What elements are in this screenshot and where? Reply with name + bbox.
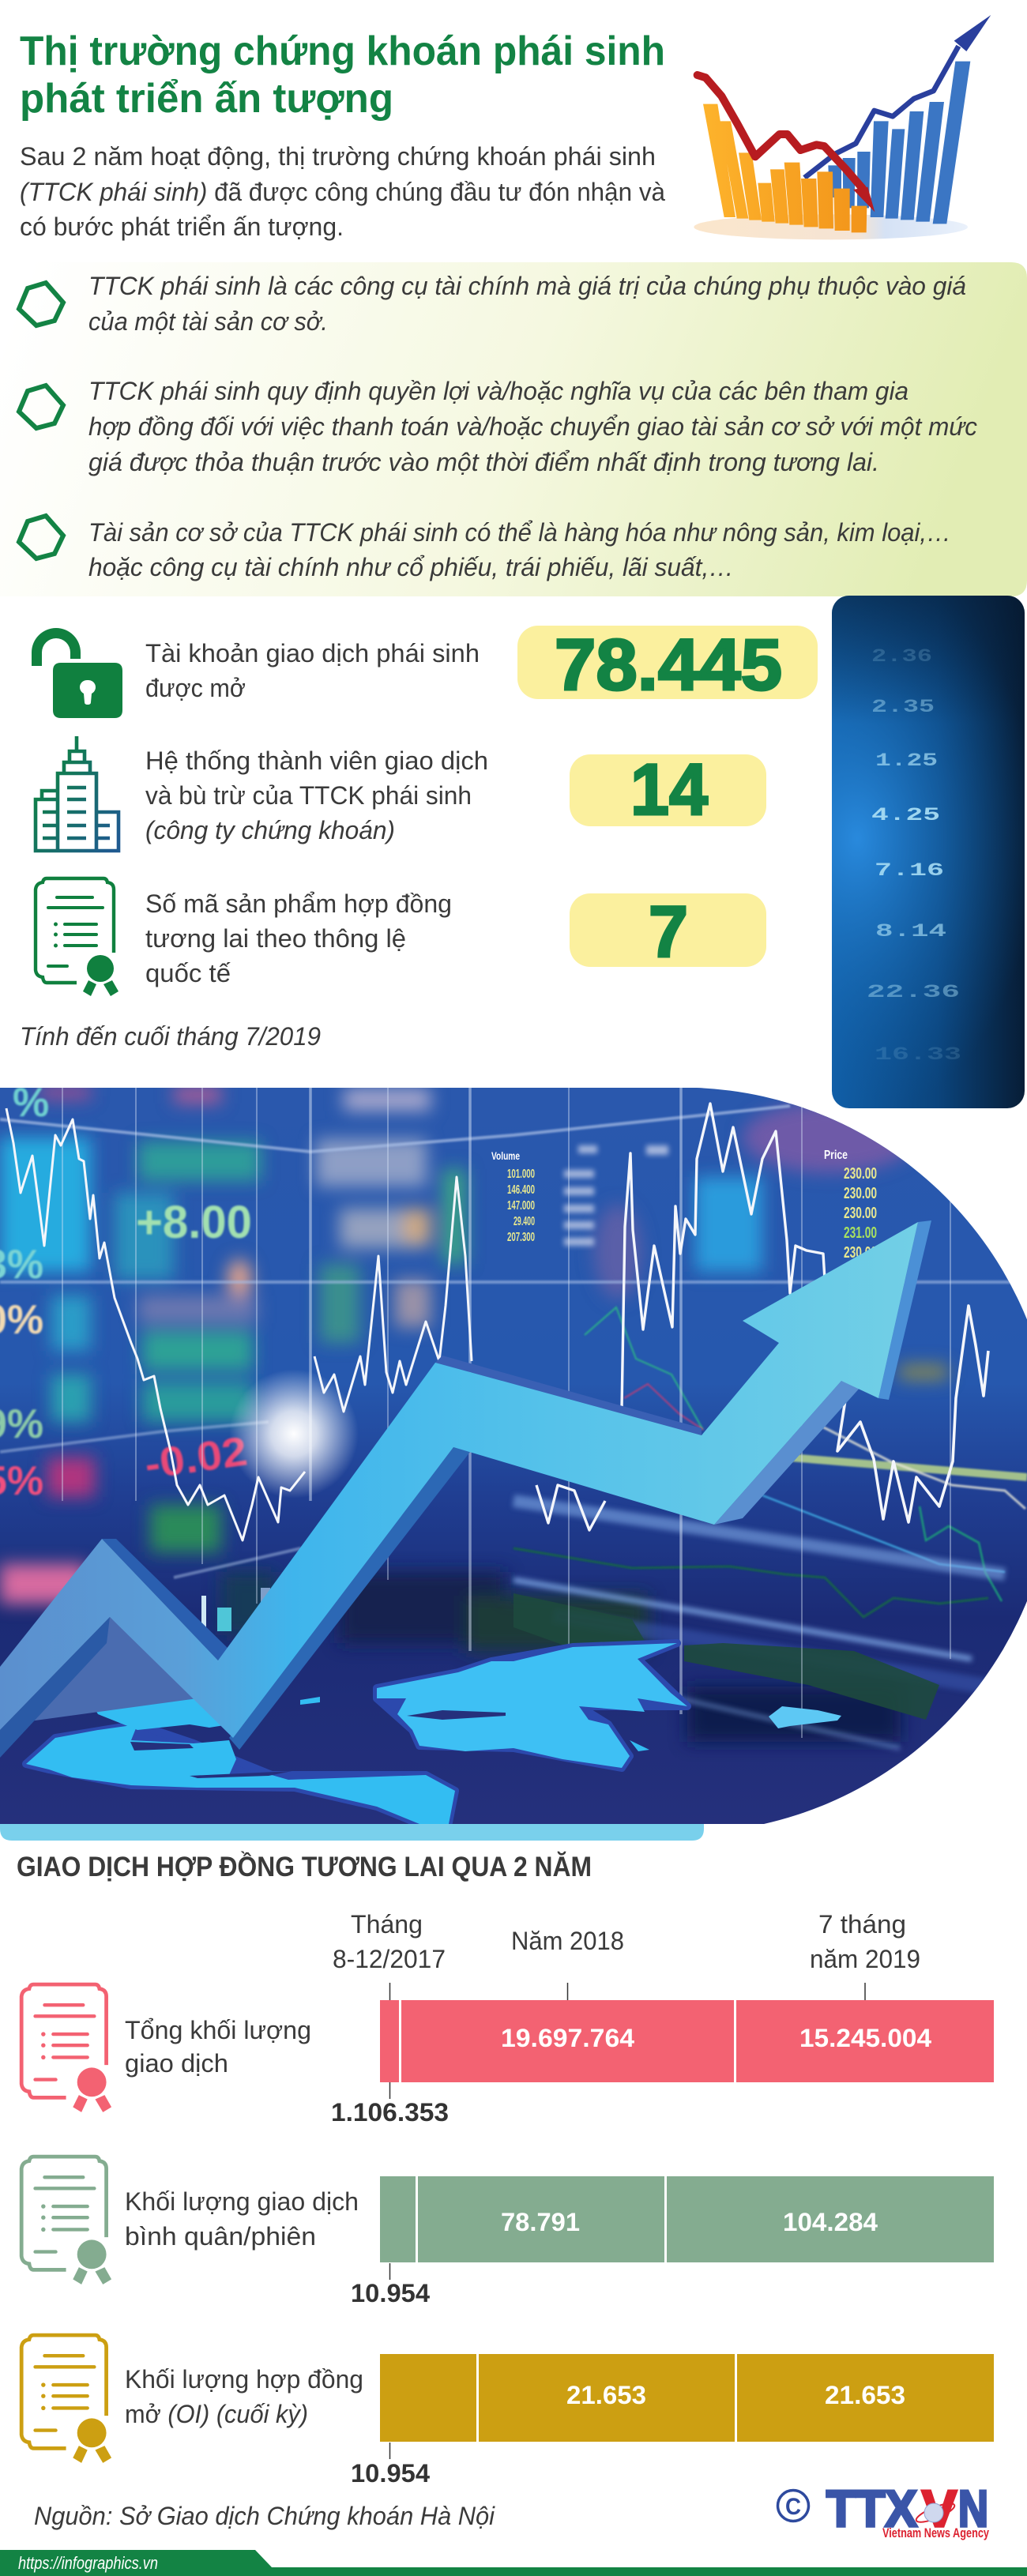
panel: blue numbers image: 8.14 xyxy=(875,921,946,942)
date note: Tính đến cuối tháng 7/2019 xyxy=(20,1022,321,1051)
grid lines xyxy=(62,1088,950,1738)
bullet text 3: Tài sản cơ sở của TTCK phái sinh có thể là hàng hóa như nông sản, kim loại,… xyxy=(88,518,951,547)
stacked bar: 19.697.764 xyxy=(501,2024,634,2052)
world map xyxy=(26,1643,841,1824)
lens flare xyxy=(229,1369,359,1499)
stat label xyxy=(145,889,452,987)
bullet text 1: TTCK phái sinh là các công cụ tài chính mà giá trị của chúng phụ thuộc vào giá xyxy=(88,272,966,300)
bullet text 2: TTCK phái sinh quy định quyền lợi và/hoặc nghĩa vụ của các bên tham gia xyxy=(88,377,908,405)
stat label: quốc tế xyxy=(145,959,231,987)
column headers: Năm 2018 xyxy=(511,1927,624,1955)
photo: stock market with rising arrow: Volume xyxy=(491,1149,520,1162)
strip under photo xyxy=(0,1817,704,1841)
stat value pill xyxy=(570,750,766,830)
icon: gold certificate xyxy=(21,2335,111,2463)
row label xyxy=(125,2365,363,2428)
source note: Nguồn: Sở Giao dịch Chứng khoán Hà Nội xyxy=(34,2502,495,2530)
bullet text 2: giá được thỏa thuận trước vào một thời điểm nhất định trong tương lai. xyxy=(88,448,879,476)
row label: Khối lượng giao dịch xyxy=(125,2187,359,2216)
stat value pill: 14 xyxy=(630,750,708,830)
stat label: Số mã sản phẩm hợp đồng xyxy=(145,889,452,918)
photo: stock market with rising arrow: 231.00 xyxy=(844,1224,877,1242)
stacked bar: 21.653 xyxy=(566,2381,646,2409)
photo: stock market with rising arrow: 230.00 xyxy=(844,1185,877,1202)
logo: TTXVN: Vietnam News Agency xyxy=(882,2525,989,2540)
small value callout xyxy=(351,2442,430,2488)
bullet text 3 xyxy=(88,518,951,581)
row label: Tổng khối lượng xyxy=(125,2016,311,2044)
footer band: https://infographics.vn xyxy=(18,2553,158,2573)
panel: blue numbers image: 2.36 xyxy=(871,646,932,667)
small value callout: 10.954 xyxy=(351,2459,430,2488)
white market lines xyxy=(6,1104,988,1540)
panel: blue numbers image: 2.35 xyxy=(871,697,935,717)
icon: hexagon bullet 3 xyxy=(19,516,63,558)
row: average volume per session xyxy=(21,2157,994,2307)
footer band xyxy=(0,2550,1027,2576)
small value callout: 10.954 xyxy=(351,2279,430,2307)
panel: blue numbers image: 1.25 xyxy=(875,750,938,771)
panel: blue numbers image: 16.33 xyxy=(875,1044,961,1065)
blue glowing streaks xyxy=(514,1501,1005,1748)
photo: stock market with rising arrow: % xyxy=(13,1080,49,1126)
photo: stock market with rising arrow: 230.00 xyxy=(844,1205,877,1222)
photo: stock market with rising arrow: -0.02 xyxy=(142,1428,250,1488)
stacked bar: 21.653 xyxy=(825,2381,905,2409)
title: Thị trường chứng khoán phái sinh xyxy=(20,28,665,74)
photo: stock market with rising arrow: 101.000 xyxy=(507,1168,535,1181)
stat label: Hệ thống thành viên giao dịch xyxy=(145,746,488,775)
icon: certificate xyxy=(36,878,118,996)
rising arrow xyxy=(0,1220,931,1758)
row label: Khối lượng hợp đồng xyxy=(125,2365,363,2394)
heading: futures trading: GIAO DỊCH HỢP ĐỒNG TƯƠNG LAI QUA 2 NĂM xyxy=(17,1851,592,1882)
photo: stock market with rising arrow xyxy=(0,1080,1027,1824)
icon: office buildings xyxy=(36,736,118,851)
stat: member companies xyxy=(36,736,766,851)
icon: red certificate xyxy=(21,1984,111,2112)
stat value pill: 7 xyxy=(649,892,688,972)
bullet text 2 xyxy=(88,377,977,476)
photo: stock market with rising arrow: 230.00 xyxy=(844,1244,877,1262)
panel: definitions xyxy=(0,262,1027,596)
icon: hexagon bullet 2 xyxy=(19,385,63,428)
icon: green certificate xyxy=(21,2157,111,2285)
icon: hexagon bullet 1 xyxy=(19,283,63,325)
stat label: được mở xyxy=(145,674,246,702)
stat: accounts opened xyxy=(32,625,818,718)
stat value pill xyxy=(570,892,766,972)
photo: stock market with rising arrow: Price xyxy=(824,1149,848,1162)
grey bars under the arrow peak xyxy=(24,1588,270,1722)
icon: open padlock xyxy=(32,628,122,718)
stat label: Tài khoản giao dịch phái sinh xyxy=(145,639,480,668)
logo: TTXVN: V xyxy=(922,2480,957,2537)
logo: TTXVN: C xyxy=(785,2494,801,2520)
stacked bar xyxy=(380,2354,994,2442)
small value callout xyxy=(351,2263,430,2307)
column headers: năm 2019 xyxy=(810,1945,920,1973)
stacked bar xyxy=(380,2000,994,2082)
bullet text 1 xyxy=(88,272,966,336)
intro text: Sau 2 năm hoạt động, thị trường chứng khoán phái sinh xyxy=(20,142,656,171)
icon: bar chart with up and down arrows xyxy=(694,15,991,239)
row: total volume xyxy=(21,1984,994,2127)
logo: TTXVN xyxy=(777,2480,989,2540)
stacked bar xyxy=(380,2176,994,2262)
panel: blue numbers image xyxy=(832,596,1025,1108)
stat value pill: 78.445 xyxy=(555,625,782,705)
small value callout: 1.106.353 xyxy=(331,2098,449,2127)
row label xyxy=(125,2016,311,2078)
photo: stock market with rising arrow: 207.300 xyxy=(507,1231,535,1244)
column headers: Tháng xyxy=(351,1910,423,1939)
stat: product codes xyxy=(36,878,766,996)
photo: stock market with rising arrow: 230.00 xyxy=(844,1165,877,1183)
stacked bar: 78.791 xyxy=(501,2208,580,2236)
stacked bar: 104.284 xyxy=(783,2208,878,2236)
row label: mở (OI) (cuối kỳ) xyxy=(125,2400,308,2428)
dark green chart band xyxy=(514,1593,939,1720)
row label: bình quân/phiên xyxy=(125,2222,316,2251)
panel: blue numbers image: 4.25 xyxy=(871,805,940,825)
title: phát triển ấn tượng xyxy=(20,76,393,122)
column headers: 8-12/2017 xyxy=(333,1945,446,1973)
streak lines xyxy=(0,1106,1027,1617)
stat label: tương lai theo thông lệ xyxy=(145,924,406,953)
bullet text 1: của một tài sản cơ sở. xyxy=(88,307,328,336)
row label: giao dịch xyxy=(125,2049,228,2078)
stat label: và bù trừ của TTCK phái sinh xyxy=(145,781,472,810)
bullet text 3: hoặc công cụ tài chính như cổ phiếu, trái phiếu, lãi suất,… xyxy=(88,553,734,581)
photo: stock market with rising arrow: 29.400 xyxy=(514,1215,535,1228)
panel: blue numbers image: 22.36 xyxy=(867,982,960,1002)
photo: stock market with rising arrow: 147.000 xyxy=(507,1199,535,1213)
column headers xyxy=(333,1910,920,2000)
logo: TTXVN: TTX xyxy=(826,2480,917,2537)
title xyxy=(20,28,665,122)
bullet text 2: hợp đồng đối với việc thanh toán và/hoặc chuyển giao tài sản cơ sở với một mức xyxy=(88,412,977,441)
photo: stock market with rising arrow: 146.400 xyxy=(507,1183,535,1197)
stacked bar: 15.245.004 xyxy=(799,2024,931,2052)
intro text xyxy=(20,142,666,241)
intro text: (TTCK phái sinh) đã được công chúng đầu tư đón nhận và xyxy=(20,178,666,206)
photo: stock market with rising arrow: +8.00 xyxy=(136,1197,252,1248)
logo: TTXVN: N xyxy=(958,2480,988,2537)
column headers: 7 tháng xyxy=(818,1910,906,1939)
intro text: có bước phát triển ấn tượng. xyxy=(20,212,344,241)
row label xyxy=(125,2187,359,2251)
stat label: (công ty chứng khoán) xyxy=(145,816,395,844)
stat label xyxy=(145,639,480,702)
row: open interest xyxy=(21,2335,994,2488)
panel: blue numbers image: 7.16 xyxy=(875,860,944,881)
stat label xyxy=(145,746,488,844)
